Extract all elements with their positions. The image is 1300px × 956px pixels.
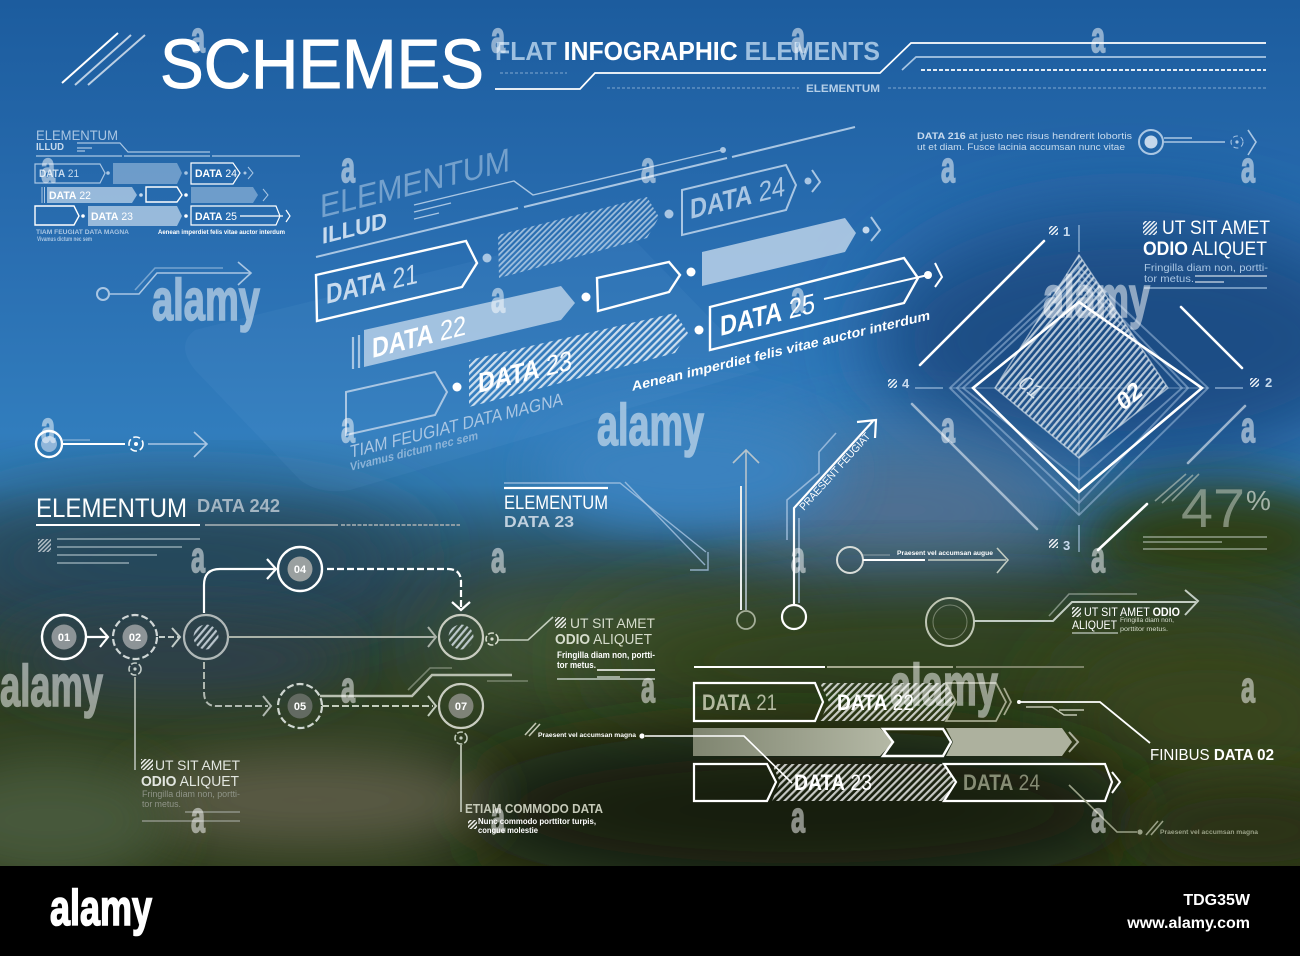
connector: left upper arrow <box>97 262 251 300</box>
callout: node 07: ETIAM COMMODO DATA <box>465 801 604 816</box>
watermark letters: a <box>191 793 205 842</box>
arrow 02 to hub <box>159 636 179 638</box>
header <box>62 25 1266 103</box>
labels: DATA 24 <box>195 168 237 180</box>
panel: small process map <box>35 127 300 243</box>
captions: Aenean imperdiet felis vitae auctor interdum <box>158 229 285 236</box>
connector dots and chevrons <box>452 170 942 392</box>
watermark letters: a <box>641 663 655 712</box>
callout: praesent vel accumsan magna right: Praesent vel accumsan magna <box>1160 829 1258 836</box>
node 04: 04 <box>294 564 307 576</box>
callout: target node: tor metus. <box>557 660 596 670</box>
captions: Vivamus dictum nec sem <box>37 236 92 243</box>
callout: node 07: Nunc commodo porttitor turpis, <box>478 817 596 826</box>
watermark letters: a <box>491 273 505 322</box>
stat: 47 percent <box>1143 474 1271 549</box>
watermark letters: a <box>191 13 205 62</box>
series label 02: 02 <box>1111 377 1149 416</box>
watermark letters: a <box>1091 533 1105 582</box>
watermark letters: a <box>1241 403 1255 452</box>
watermark words: alamy <box>0 654 103 719</box>
text block: data 216 <box>917 131 1132 153</box>
frame strokes <box>912 241 1245 550</box>
watermark letters: a <box>491 533 505 582</box>
watermark letters: a <box>791 13 805 62</box>
heading: ELEMENTUM <box>320 142 510 226</box>
node 07 <box>439 684 483 728</box>
bar labels: DATA 22 <box>837 690 914 715</box>
arrow: vertical up <box>733 450 759 629</box>
caption left: TIAM FEUGIAT DATA MAGNA <box>350 388 564 462</box>
labels: DATA 22 <box>49 190 91 202</box>
callout: elementum data 23 with arrow: ELEMENTUM <box>504 493 608 514</box>
callout: target node: ODIO ALIQUET <box>555 631 652 648</box>
caption left small: Vivamus dictum nec sem <box>350 428 478 474</box>
text block: top right callout: Fringilla diam non, portti- <box>1144 262 1269 274</box>
callout: node 02: Fringilla diam non, portti- <box>142 789 240 799</box>
watermark words: alamy <box>597 393 704 458</box>
labels: DATA 22 <box>372 310 466 365</box>
watermark words: alamy <box>1043 265 1150 330</box>
footer: alamy logo: alamy <box>50 880 152 936</box>
shape: empty middle <box>597 262 680 311</box>
connector: ut sit amet small: porttitor metus. <box>1120 627 1168 633</box>
watermark letters: a <box>1241 663 1255 712</box>
chevron <box>1004 688 1011 715</box>
stat: 47 percent: 47 <box>1181 477 1245 539</box>
shape: hatched top <box>498 197 659 278</box>
captions: TIAM FEUGIAT DATA MAGNA <box>36 229 130 236</box>
header label: ELEMENTUM <box>806 83 880 95</box>
callout: target node <box>486 615 655 679</box>
subtitle: FLAT INFOGRAPHIC ELEMENTS <box>495 36 880 66</box>
watermark words: alamy <box>152 268 260 333</box>
panel: perspective process map <box>316 127 942 474</box>
footer: image id and url: TDG35W <box>1183 892 1251 909</box>
callout: target node: Fringilla diam non, portti- <box>557 650 655 660</box>
bar: data 21 <box>694 683 823 721</box>
bar: middle notch <box>883 729 951 756</box>
arrowhead <box>452 602 470 610</box>
labels <box>326 171 815 400</box>
faint series diamonds <box>950 267 1208 515</box>
text block: data 216: DATA 216 at justo nec risus hendrerit lobortis <box>917 131 1132 142</box>
rules <box>36 143 300 156</box>
callout: praesent vel accumsan magna right <box>1069 785 1258 836</box>
labels: DATA 21 <box>326 258 418 311</box>
arrowhead <box>263 696 271 716</box>
callout: elementum data 23 with arrow <box>504 482 708 570</box>
bar: empty <box>694 764 776 801</box>
callout: node 07 <box>455 732 604 835</box>
chevron <box>1069 732 1078 752</box>
heading: elementum data 242 <box>36 493 460 563</box>
node 07: 07 <box>455 701 467 713</box>
bar outline <box>946 683 1006 721</box>
watermark letters: a <box>791 533 805 582</box>
axis labels <box>888 224 1272 553</box>
chart: radar diamond <box>888 224 1272 553</box>
callout: node 07: congue molestie <box>478 826 539 835</box>
callout: finibus data 02 <box>1017 700 1274 764</box>
connector: left lower arrow <box>36 431 207 457</box>
watermark letters: a <box>41 403 55 452</box>
watermark letters: a <box>341 403 355 452</box>
watermark letters: a <box>341 663 355 712</box>
bar: middle right <box>946 728 1072 756</box>
node 02 <box>113 615 157 659</box>
axes <box>915 225 1243 552</box>
arrow: praesent feugiat <box>782 420 876 629</box>
watermark letters: a <box>491 793 505 842</box>
watermark letters: a <box>341 143 355 192</box>
shapes row two <box>42 187 268 203</box>
shapes row one <box>35 163 253 184</box>
connector: ut sit amet small <box>926 590 1198 646</box>
bar labels: DATA 24 <box>963 770 1040 795</box>
caption right: Aenean imperdiet felis vitae auctor interdum <box>632 308 930 394</box>
node 04 <box>278 547 322 591</box>
arrow: praesent feugiat: PRAESENT FEUGIAT <box>797 430 874 513</box>
connector: praesent vel accumsan augue <box>837 547 1008 573</box>
watermark letters: a <box>941 403 955 452</box>
connector: ut sit amet small: Fringilla diam non, <box>1120 618 1174 624</box>
labels: DATA 25 <box>720 288 815 343</box>
watermark letters: a <box>791 793 805 842</box>
watermark letters: a <box>41 143 55 192</box>
hatched series <box>995 255 1168 458</box>
heading: elementum data 242: DATA 242 <box>197 496 280 516</box>
watermark words: alamy <box>890 653 998 718</box>
shape: data 22 <box>353 286 575 369</box>
labels: DATA 23 <box>91 211 133 223</box>
labels <box>39 168 237 223</box>
rules <box>316 127 855 257</box>
heading: elementum data 242: ELEMENTUM <box>36 493 187 523</box>
text block: data 216: ut et diam. Fusce lacinia accumsan nunc vitae <box>917 142 1125 153</box>
labels: DATA 25 <box>195 211 237 223</box>
axis labels: 3 <box>1063 538 1070 553</box>
header rules <box>495 43 1266 89</box>
title: SCHEMES <box>160 25 484 103</box>
flowchart <box>42 547 528 728</box>
text block: top right callout: tor metus. <box>1144 273 1194 285</box>
bar: middle left <box>693 728 893 756</box>
subheading: ILLUD <box>36 142 64 153</box>
shape: empty lower <box>346 372 447 435</box>
chevron <box>1112 772 1120 793</box>
callout: praesent vel accumsan magna left: Praesent vel accumsan magna <box>538 732 636 739</box>
series labels: 01 <box>1014 371 1046 404</box>
axis labels: 1 <box>1063 224 1070 239</box>
watermark letters: a <box>791 273 805 322</box>
bar labels: DATA 23 <box>794 770 872 795</box>
node 05 <box>278 684 322 728</box>
connector: praesent vel accumsan augue: Praesent vel accumsan augue <box>897 550 993 557</box>
callout: target node: UT SIT AMET <box>570 615 655 631</box>
axis labels: 4 <box>902 376 910 391</box>
watermark letters: a <box>1091 793 1105 842</box>
shape: data 23 <box>469 313 688 407</box>
node 02: 02 <box>129 632 141 644</box>
hub node <box>184 615 228 659</box>
subheading: ILLUD <box>322 207 387 249</box>
dashed arrow 04 to target <box>327 569 461 608</box>
watermark letters: a <box>1091 13 1105 62</box>
bar: data 22 <box>820 683 956 721</box>
text block: top right callout <box>1143 218 1270 288</box>
white series <box>973 302 1202 492</box>
arrow to node 04 <box>204 559 276 613</box>
labels: DATA 24 <box>690 171 785 226</box>
decorative connector <box>320 668 528 696</box>
dashed arrow 05 to 07 <box>322 705 433 707</box>
rules <box>694 666 1084 668</box>
callout: node 02 <box>129 663 240 821</box>
shape: data 25 <box>710 258 918 350</box>
captions <box>36 229 285 243</box>
bar labels: DATA 21 <box>702 690 777 715</box>
callout: node 02: tor metus. <box>142 799 181 809</box>
node 01: 01 <box>58 632 70 644</box>
black footer strip <box>0 866 1300 956</box>
centre arrow <box>228 627 436 647</box>
shape: filled top <box>702 218 856 286</box>
shapes row three <box>35 206 290 226</box>
bar: data 24 <box>944 764 1112 801</box>
watermark letters: a <box>941 143 955 192</box>
arrowhead <box>172 628 180 647</box>
arrowhead <box>428 696 436 716</box>
labels: DATA 23 <box>478 345 572 400</box>
watermark letters: a <box>1241 143 1255 192</box>
watermark letters: a <box>641 143 655 192</box>
callout: node 02: UT SIT AMET <box>155 757 240 773</box>
watermark letters: a <box>491 13 505 62</box>
icon: header slashes <box>62 33 145 85</box>
footer: image id and url <box>1126 892 1251 932</box>
lower dashed arrow <box>204 662 268 706</box>
axis labels: 2 <box>1265 375 1272 390</box>
shape: data 24 <box>682 165 796 235</box>
callout: finibus data 02: FINIBUS DATA 02 <box>1150 747 1274 764</box>
shape: data 21 <box>316 241 477 321</box>
footer: image id and url: www.alamy.com <box>1126 915 1250 932</box>
bar labels <box>702 690 1040 795</box>
panel: arrow bars <box>693 667 1120 801</box>
watermark letters: a <box>191 533 205 582</box>
connector: data 216 <box>1139 130 1256 155</box>
watermark words <box>0 265 1150 719</box>
text block: top right callout: UT SIT AMET <box>1162 218 1270 239</box>
node 05: 05 <box>294 701 306 713</box>
text block: top right callout: ODIO ALIQUET <box>1143 239 1267 260</box>
stat: 47 percent: % <box>1246 485 1271 516</box>
bar: data 23 <box>772 764 956 801</box>
connector: ut sit amet small: UT SIT AMET ODIO <box>1084 607 1180 619</box>
connector: ut sit amet small: ALIQUET <box>1072 618 1118 632</box>
callout: elementum data 23 with arrow: DATA 23 <box>504 514 574 531</box>
node 01 <box>42 615 86 659</box>
labels: DATA 21 <box>39 168 79 180</box>
arrow 01 to 02 <box>86 628 108 647</box>
target node <box>439 615 483 659</box>
callout: praesent vel accumsan magna left <box>525 723 792 783</box>
callout: node 02: ODIO ALIQUET <box>141 773 239 790</box>
heading: ELEMENTUM <box>36 127 118 143</box>
